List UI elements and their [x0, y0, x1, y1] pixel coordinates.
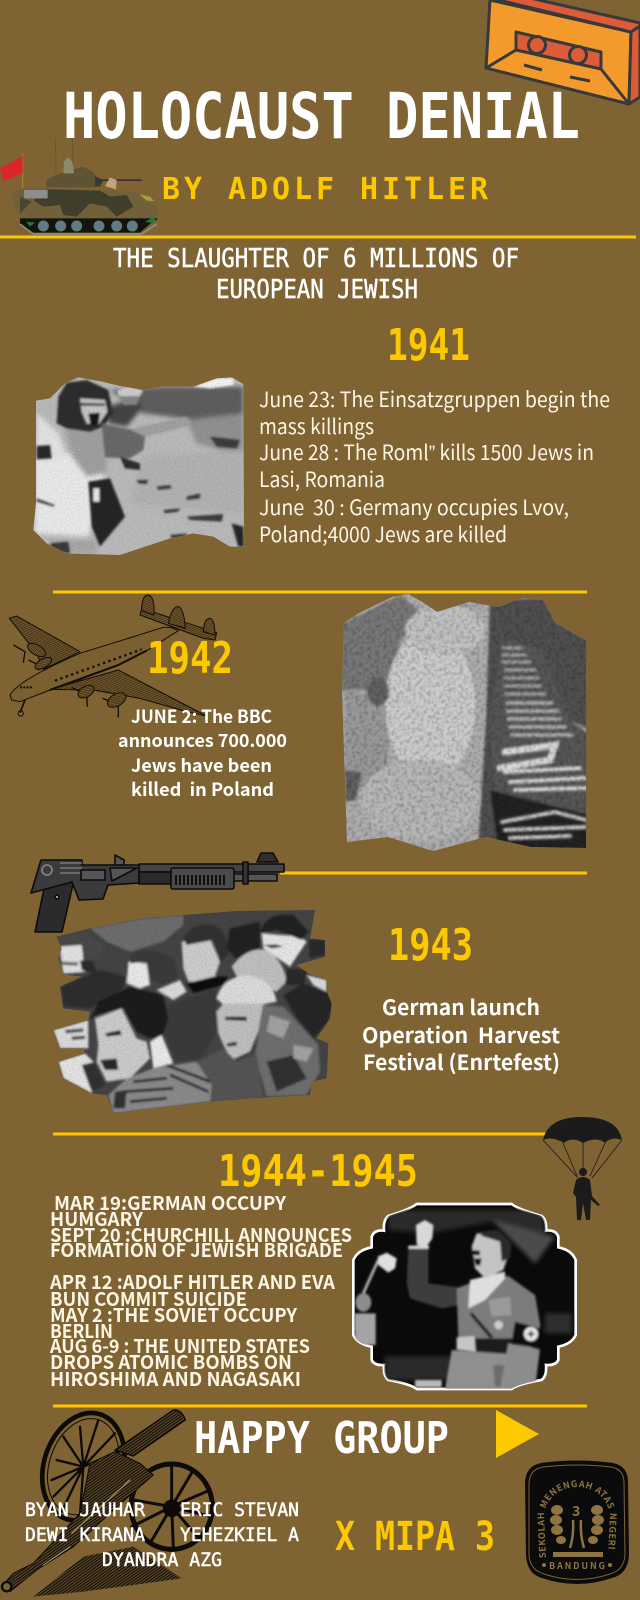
text: 1944-1945 events: BERLIN: [50, 1317, 113, 1344]
text: 1942 event: announces 700.000: [118, 727, 287, 753]
text: 1944-1945 events: [49, 1189, 352, 1392]
icon: airplane sketch: [9, 595, 217, 717]
text: 1944-1945 events: DROPS ATOMIC BOMBS ON: [50, 1348, 292, 1375]
year 1942: 1942: [147, 633, 233, 684]
photo: 1941 woman: [33, 378, 244, 555]
arrow: yellow triangle: [496, 1410, 539, 1458]
year range 1944-1945: 1944-1945: [218, 1146, 418, 1197]
text: 1942 event: JUNE 2: The BBC: [131, 703, 272, 729]
text: 1944-1945 events: MAY 2 :THE SOVIET OCCUPY: [50, 1301, 298, 1328]
text: 1943 event: [362, 992, 560, 1077]
illustration: cannon sketch: [2, 1402, 212, 1597]
text: 1941 events: Lasi, Romania: [259, 464, 385, 494]
text: 1941 events: mass killings: [259, 411, 374, 441]
heading: the slaughter: [113, 244, 519, 305]
photo: Hitler speaking: [353, 1204, 576, 1389]
text: 1941 events: [259, 384, 610, 549]
class label: X MIPA 3: X MIPA 3: [335, 1514, 495, 1560]
text: 1944-1945 events: BUN COMMIT SUICIDE: [50, 1285, 247, 1312]
text: group member names: ERIC STEVAN: [180, 1499, 299, 1521]
icon: gun: [31, 853, 284, 932]
text: group member names: DEWI KIRANA: [25, 1524, 146, 1546]
text: 1941 events: June 30 : Germany occupies Lvov,: [259, 492, 569, 522]
icon: cassette tape: [486, 0, 640, 104]
icon: parachutist: [543, 1117, 622, 1220]
photo: crowd of prisoners: [50, 905, 340, 1120]
text: group member names: [25, 1499, 300, 1571]
text: 1943 event: Operation Harvest: [362, 1020, 560, 1050]
text: 1944-1945 events: HIROSHIMA AND NAGASAKI: [50, 1365, 301, 1392]
heading: the slaughter: EUROPEAN JEWISH: [216, 275, 418, 305]
year 1943: 1943: [388, 920, 473, 971]
text: 1944-1945 events: SEPT 20 :CHURCHILL ANNOUNCES: [50, 1221, 352, 1248]
heading: the slaughter: THE SLAUGHTER OF 6 MILLIONS OF: [113, 244, 519, 274]
emblem lettering: SEKOLAH MENENGAH ATAS NEGERI: [537, 1480, 617, 1558]
text: 1942 event: killed in Poland: [131, 776, 274, 802]
text: group member names: DYANDRA AZG: [102, 1549, 222, 1571]
emblem lettering: BANDUNG: [549, 1559, 605, 1572]
text: 1944-1945 events: APR 12 :ADOLF HITLER AND EVA: [49, 1268, 336, 1295]
divider line: [53, 1404, 587, 1408]
text: 1941 events: June 28 : The Roml” kills 1500 Jews in: [259, 437, 594, 467]
text: 1944-1945 events: HUMGARY: [50, 1205, 144, 1232]
text: 1941 events: Poland;4000 Jews are killed: [259, 519, 507, 549]
year 1941: 1941: [387, 320, 470, 371]
icon: tank: [0, 138, 159, 234]
text: 1943 event: German launch: [382, 992, 540, 1022]
text: 1942 event: [118, 703, 287, 802]
divider line: [0, 236, 636, 238]
divider line: [53, 590, 587, 594]
icon: school emblem: [525, 1460, 629, 1584]
heading: Happy Group: HAPPY GROUP: [194, 1413, 449, 1464]
divider line: [280, 872, 587, 874]
text: 1944-1945 events: FORMATION OF JEWISH BRIGADE: [50, 1236, 343, 1263]
text: 1942 event: Jews have been: [131, 752, 272, 778]
divider line: [53, 1132, 548, 1136]
text: 1944-1945 events: MAR 19:GERMAN OCCUPY: [54, 1189, 287, 1216]
text: 1941 events: June 23: The Einsatzgruppen begin the: [259, 384, 610, 414]
text: group member names: BYAN JAUHAR: [25, 1499, 146, 1521]
subtitle: by Adolf Hitler: BY ADOLF HITLER: [162, 172, 489, 207]
text: 1944-1945 events: AUG 6-9 : THE UNITED STATES: [49, 1332, 310, 1359]
photo: mass grave: [335, 590, 595, 855]
icon: school emblem: 3: [572, 1501, 580, 1521]
text: group member names: YEHEZKIEL A: [180, 1524, 300, 1546]
text: 1943 event: Festival (Enrtefest): [363, 1047, 560, 1077]
